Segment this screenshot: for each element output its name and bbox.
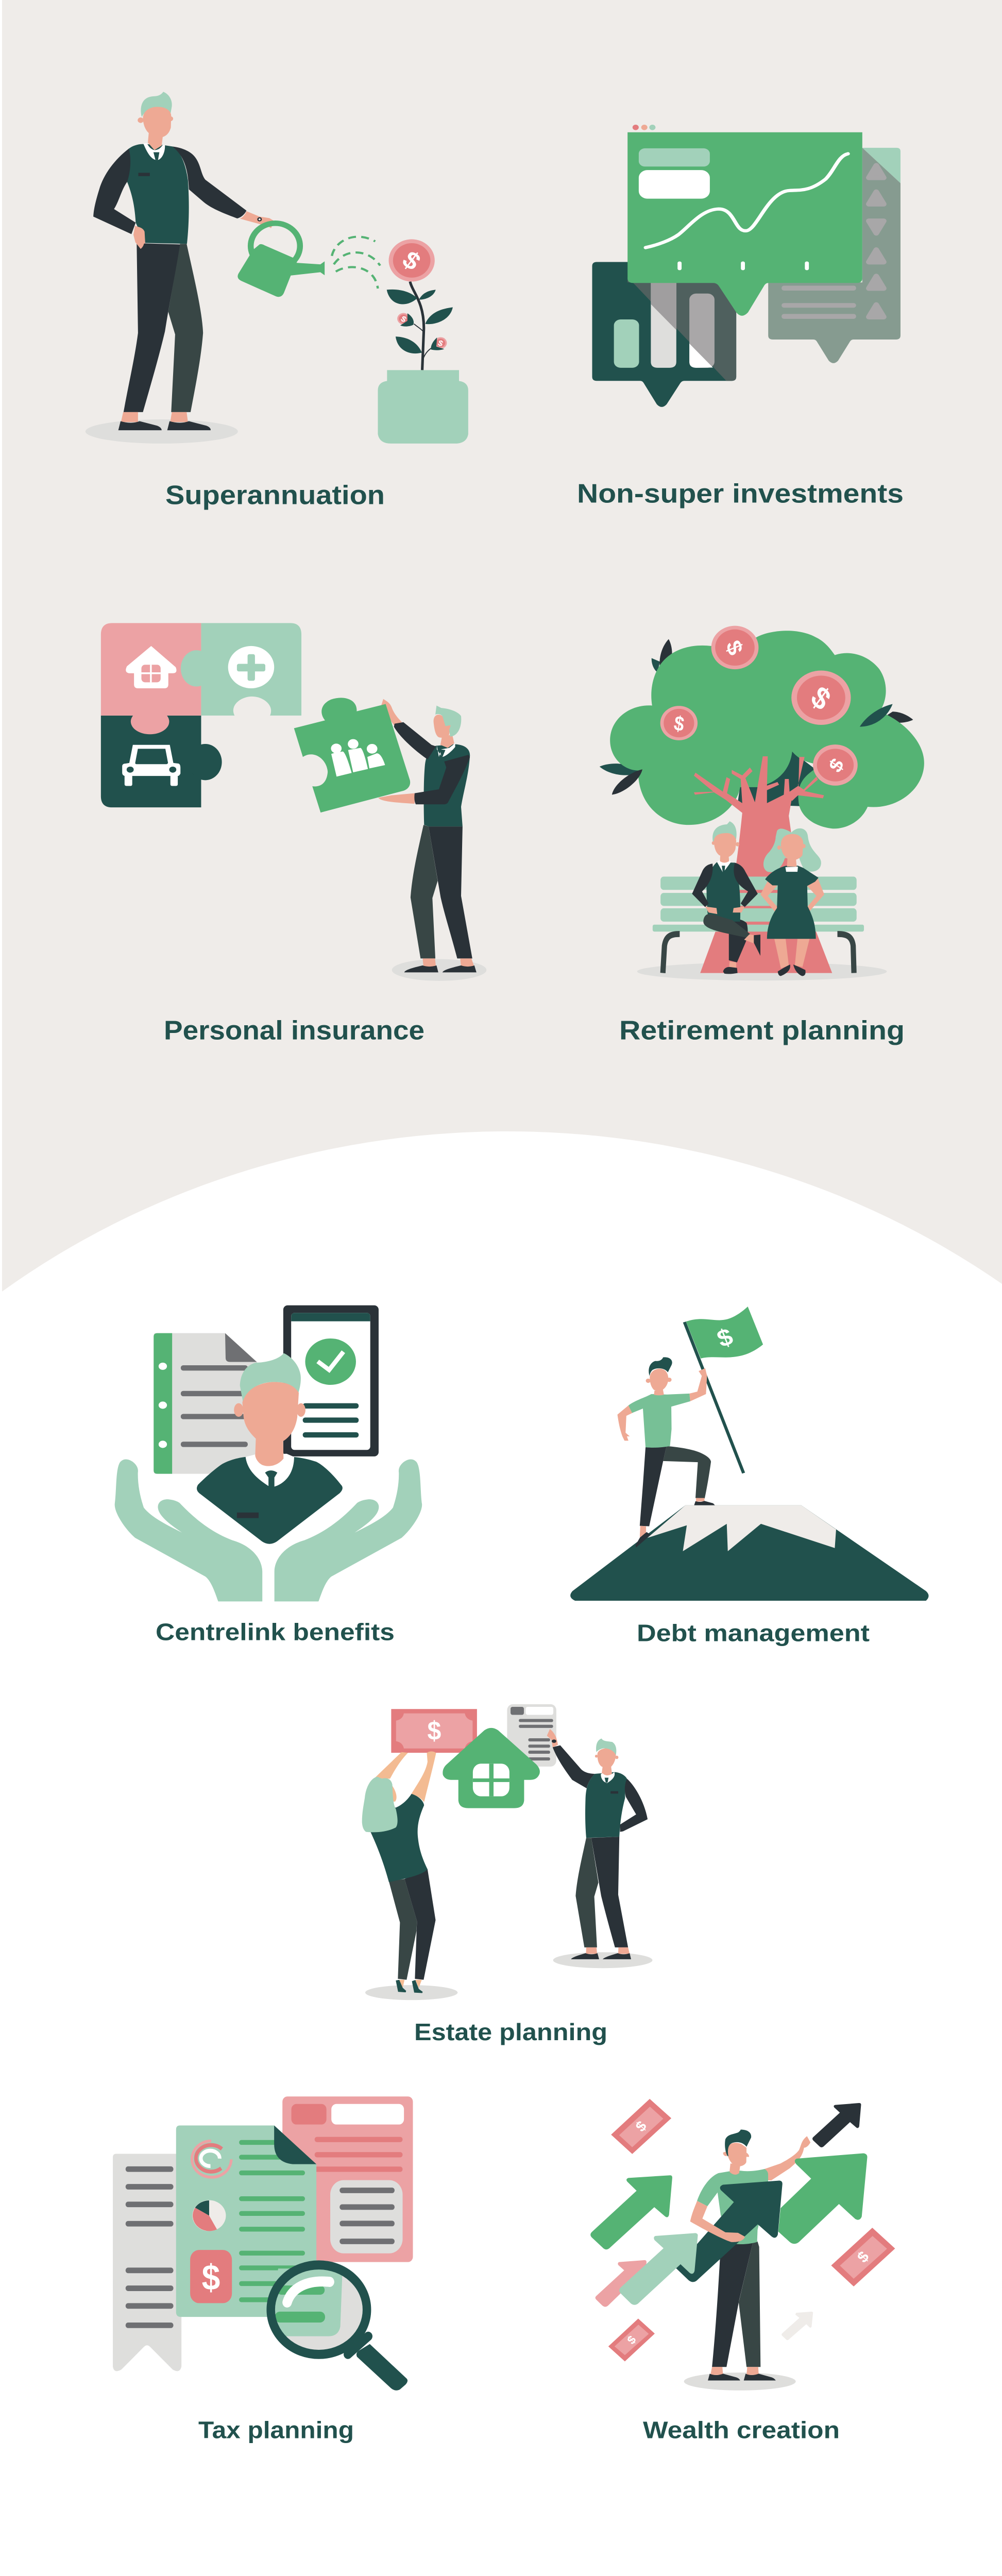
panel: personal insurance illustration bbox=[101, 623, 486, 981]
seated man bbox=[692, 821, 760, 974]
pink form bbox=[282, 2096, 413, 2262]
grey receipt ribbon bbox=[113, 2154, 181, 2371]
man carrying arrow bbox=[619, 2130, 867, 2391]
heading: Estate planning: Estate planning bbox=[414, 2020, 607, 2045]
mint tax document bbox=[176, 2126, 316, 2317]
floating banknotes: $ bbox=[633, 2118, 650, 2135]
man holding family puzzle piece bbox=[294, 698, 486, 981]
snowy mountain bbox=[570, 1505, 929, 1601]
advisor bust bbox=[197, 1353, 343, 1544]
background: beige top with white arc bbox=[2, 0, 1002, 1292]
money tree: $ bbox=[672, 711, 686, 736]
panel: wealth creation illustration bbox=[590, 2099, 895, 2391]
floating banknotes: $ bbox=[854, 2248, 873, 2266]
dollar flag bbox=[685, 1307, 763, 1473]
growth arrows bbox=[590, 2103, 861, 2340]
banknote: $ bbox=[427, 1716, 441, 1745]
panel: tax planning illustration bbox=[113, 2096, 413, 2391]
clipboard with check bbox=[283, 1306, 379, 1456]
woman holding banknote bbox=[362, 1752, 457, 2000]
heading: Non-super investments: Non-super investments bbox=[577, 479, 904, 509]
plant with dollar coins in jar: $ bbox=[397, 246, 426, 276]
money tree: $ bbox=[825, 754, 848, 776]
banknote bbox=[391, 1709, 477, 1753]
plant with dollar coins in jar: $ bbox=[399, 315, 408, 324]
magnifying glass bbox=[271, 2265, 407, 2391]
panel: non-super investments illustration bbox=[592, 125, 901, 407]
green house icon bbox=[443, 1728, 540, 1808]
money tree bbox=[600, 626, 924, 973]
jigsaw of house, health and car bbox=[101, 623, 301, 807]
paper will document bbox=[507, 1704, 556, 1767]
dollar flag: $ bbox=[714, 1324, 737, 1352]
heading: Centrelink benefits: Centrelink benefits bbox=[156, 1620, 395, 1646]
panel: superannuation illustration bbox=[86, 92, 468, 444]
floating banknotes: $ bbox=[624, 2333, 639, 2347]
caring hands bbox=[115, 1460, 422, 1601]
plant with dollar coins in jar: $ bbox=[436, 339, 444, 348]
heading: Wealth creation: Wealth creation bbox=[643, 2417, 840, 2444]
watering can bbox=[237, 223, 380, 297]
heading: Personal insurance: Personal insurance bbox=[164, 1016, 424, 1045]
park bench bbox=[653, 876, 864, 973]
grey list speech bubble bbox=[768, 148, 901, 363]
plant with dollar coins in jar bbox=[378, 239, 468, 444]
dark bar chart speech bubble bbox=[592, 262, 736, 407]
man climbing bbox=[617, 1357, 715, 1548]
panel: centrelink benefits illustration bbox=[115, 1306, 422, 1601]
mint tax document: $ bbox=[202, 2258, 220, 2298]
panel: debt management illustration bbox=[570, 1307, 929, 1601]
green line chart window bbox=[627, 125, 862, 316]
heading: Retirement planning: Retirement planning bbox=[619, 1016, 905, 1045]
money tree: $ bbox=[721, 637, 748, 659]
heading: Superannuation: Superannuation bbox=[165, 481, 385, 510]
panel: estate planning illustration bbox=[362, 1704, 652, 2000]
document with green binding bbox=[154, 1333, 257, 1474]
heading: Tax planning: Tax planning bbox=[198, 2417, 354, 2444]
floating banknotes bbox=[608, 2099, 895, 2361]
panel: retirement planning illustration bbox=[600, 626, 924, 980]
money tree: $ bbox=[805, 679, 836, 717]
heading: Debt management: Debt management bbox=[637, 1620, 870, 1647]
man watering plant bbox=[86, 92, 275, 444]
seated woman bbox=[760, 828, 824, 976]
man pointing at document bbox=[547, 1729, 652, 1968]
